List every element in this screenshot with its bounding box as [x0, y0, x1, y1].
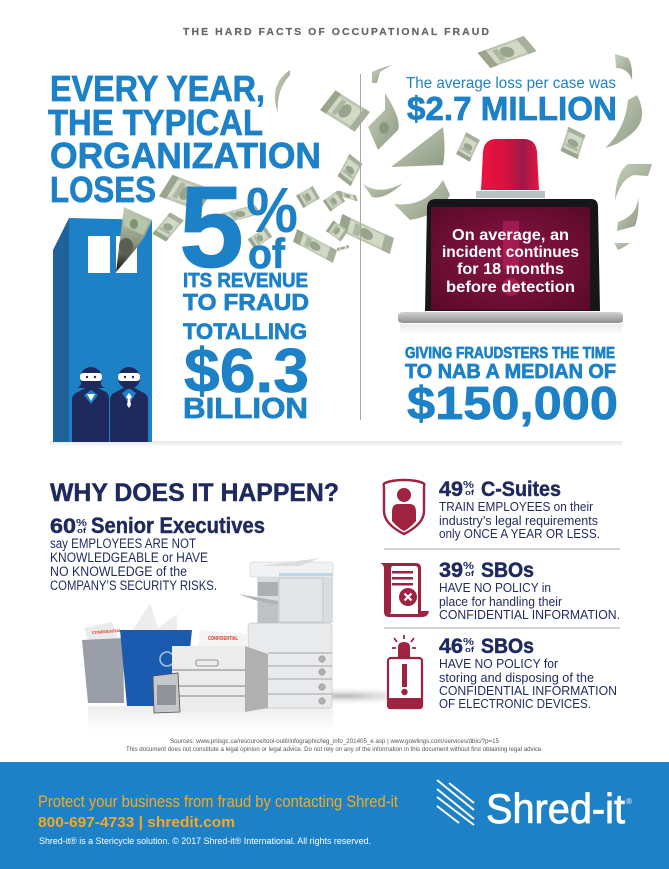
stat: 5% of its revenue: TO FRAUD: [183, 289, 309, 315]
laptop base: [398, 312, 623, 323]
icon: phone with alarm: [387, 635, 423, 709]
icon: policy scroll: [381, 563, 429, 617]
text block: of: [465, 571, 475, 578]
text block: storing and disposing of the: [439, 670, 594, 685]
hard drive: [153, 673, 180, 713]
screen text: [442, 227, 579, 296]
text block: %: [463, 480, 474, 491]
female figure: [72, 367, 109, 442]
bill from window: [116, 207, 152, 272]
call to action: Protect your business from fraud by contacting Shred-it: [38, 793, 398, 811]
stat: 5% of its revenue: 5: [179, 162, 244, 292]
stat: 49% C-Suites: [384, 478, 600, 541]
stat: median of $150,000: $150,000: [407, 377, 618, 429]
contact details: 800-697-4733 | shredit.com: [38, 814, 235, 831]
money bills scattered: [152, 36, 652, 263]
logo: Shred-it: [486, 785, 625, 832]
text block: %: [463, 637, 474, 648]
text block: [439, 635, 617, 711]
text block: %: [463, 561, 474, 572]
stat: 60% senior executives: 60: [50, 515, 76, 538]
text block: only ONCE A YEAR OR LESS.: [439, 526, 600, 541]
copyright: Shred-it® is a Stericycle solution. © 2017 Shred-it® International. All rights reserved.: [39, 836, 371, 846]
illustration: office equipment: [82, 558, 445, 732]
headline: ORGANIZATION: [50, 135, 321, 176]
illustration: laptop with siren: [398, 139, 623, 334]
stat: 60% senior executives: %: [76, 518, 87, 529]
stat: 60% senior executives: NO KNOWLEDGE of the: [50, 564, 187, 579]
text block: place for handling their: [439, 594, 563, 609]
building front: [69, 218, 152, 442]
footer band: [0, 762, 669, 869]
laptop lid: [425, 199, 600, 311]
sources and disclaimer: This document does not constitute a legal opinion or legal advice. Do not rely on any of the information in this document without first obtaining legal advice.: [126, 746, 543, 753]
stat: 5% of its revenue: [179, 162, 309, 315]
text block: OF ELECTRONIC DEVICES.: [439, 696, 591, 711]
text block: SBOs: [481, 559, 534, 582]
windows: [88, 236, 137, 273]
file box: [172, 630, 268, 712]
vertical divider: [360, 74, 361, 420]
stat: 5% of its revenue: %: [246, 174, 298, 246]
text block: 46: [439, 635, 463, 658]
screen text: incident continues: [442, 244, 579, 261]
stat: average loss per case: The average loss per case was: [406, 75, 616, 92]
stat: 5% of its revenue: of: [248, 230, 286, 277]
stat: 60% senior executives: Senior Executives: [91, 513, 265, 538]
laptop screen: [431, 207, 590, 310]
stat: median of $150,000: TO NAB A MEDIAN OF: [405, 361, 616, 383]
stat: median of $150,000: GIVING FRAUDSTERS THE TIME: [405, 345, 615, 362]
stat: 39% SBOs: [381, 559, 620, 622]
text block: of: [465, 647, 475, 654]
stat: 46% SBOs: [387, 635, 617, 711]
text block: CONFIDENTIAL INFORMATION.: [439, 607, 620, 622]
stat: 60% senior executives: say EMPLOYEES ARE NOT: [50, 536, 196, 551]
laptop reflection: [400, 324, 622, 334]
text block: 39: [439, 559, 463, 582]
file box: CONFIDENTIAL: [208, 636, 238, 642]
building side: [53, 218, 69, 442]
icon: shield with person: [384, 480, 424, 534]
copier: [238, 558, 333, 708]
floor shadow: [50, 441, 622, 447]
stat: 60% senior executives: COMPANY’S SECURITY RISKS.: [50, 578, 217, 593]
sources and disclaimer: [126, 738, 543, 753]
stat: 60% senior executives: KNOWLEDGEABLE or HAVE: [50, 550, 208, 565]
text block: C-Suites: [481, 478, 561, 501]
screen exclamation: [503, 221, 519, 269]
male figure: [110, 367, 148, 442]
wastebasket: CONFIDENTIAL: [92, 628, 122, 635]
stat: 60% senior executives: [50, 513, 265, 593]
logo: [437, 780, 632, 832]
stat: 60% senior executives: of: [77, 528, 87, 535]
sources and disclaimer: Sources: www.priisgc.ca/resource/tool-outil/infographic/leg_info_201405_e.asp | www.gowlings.com/services/dbic/?p=15: [170, 738, 500, 745]
headline: EVERY YEAR,: [50, 68, 265, 109]
floor shadow and reflection: [245, 686, 445, 706]
siren dome: [481, 139, 539, 190]
siren base: [476, 191, 545, 198]
stat: median of $150,000: [405, 345, 618, 429]
heading: why does it happen: WHY DOES IT HAPPEN?: [50, 479, 339, 507]
stat: totalling $6.3 billion: BILLION: [183, 393, 308, 425]
text block: SBOs: [481, 635, 534, 658]
stat: 5% of its revenue: ITS REVENUE: [183, 270, 308, 292]
text block: 49: [439, 478, 463, 501]
stat: average loss per case: $2.7 MILLION: [407, 90, 617, 127]
text block: [439, 478, 600, 541]
logo: ®: [626, 797, 632, 806]
screen text: before detection: [446, 279, 575, 296]
text block: industry’s legal requirements: [439, 513, 598, 528]
illustration: building with fraudsters: [53, 207, 152, 442]
text block: HAVE NO POLICY for: [439, 656, 559, 671]
stat: totalling $6.3 billion: TOTALLING: [183, 319, 307, 344]
headline: LOSES: [50, 169, 156, 210]
text block: CONFIDENTIAL INFORMATION: [439, 683, 617, 698]
footer background: [0, 762, 669, 869]
text block: HAVE NO POLICY in: [439, 580, 551, 595]
screen text: On average, an: [452, 227, 569, 244]
text block: of: [465, 490, 475, 497]
text block: [439, 559, 620, 622]
text block: TRAIN EMPLOYEES on their: [439, 499, 594, 514]
screen text: for 18 months: [457, 261, 564, 278]
wastebasket: [82, 622, 124, 703]
blue recycling bin: [120, 603, 192, 706]
stat: totalling $6.3 billion: $6.3: [184, 337, 309, 406]
stat: totalling $6.3 billion: [183, 319, 309, 425]
headline: [48, 68, 321, 210]
headline: THE TYPICAL: [48, 102, 263, 143]
page title: THE HARD FACTS OF OCCUPATIONAL FRAUD: [183, 26, 489, 38]
